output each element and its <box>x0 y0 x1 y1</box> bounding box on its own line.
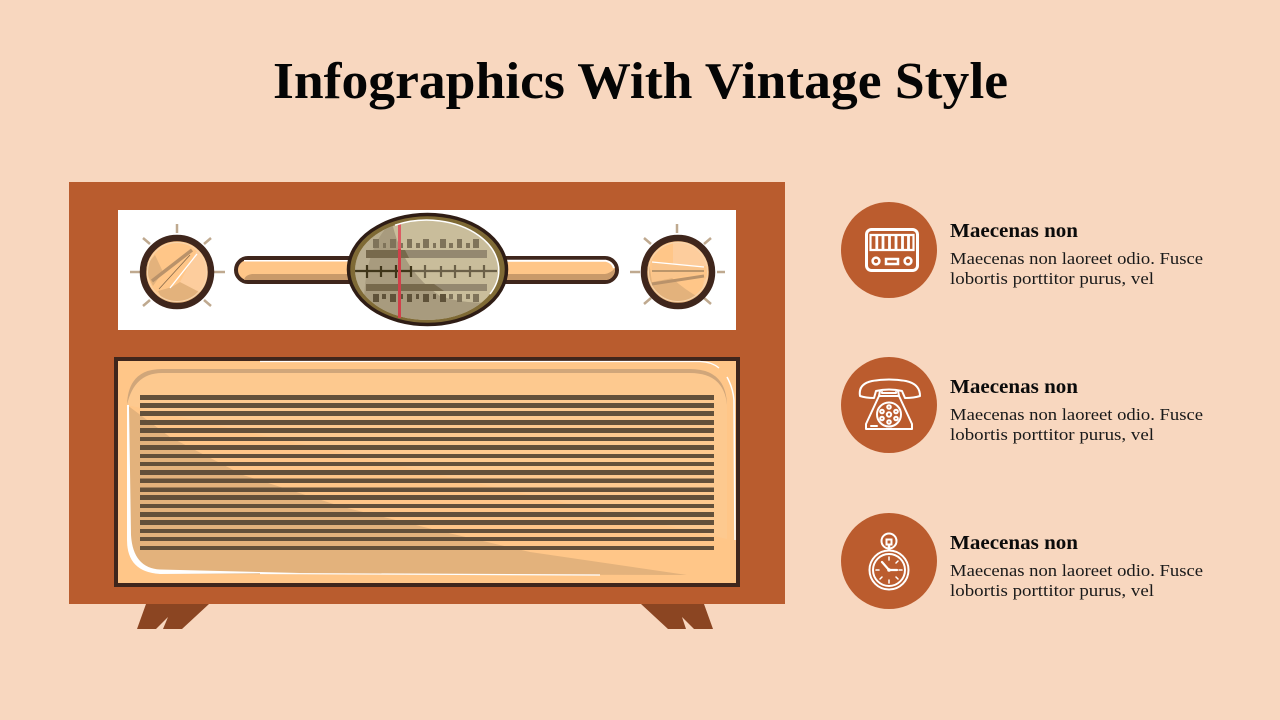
icon: stopwatch <box>841 513 937 609</box>
left knob <box>130 224 225 306</box>
item 1: radio <box>841 202 1203 298</box>
speaker inner highlight <box>127 371 727 539</box>
dial centre scale, dark side <box>354 265 412 278</box>
icon: telephone <box>841 357 937 453</box>
speaker white edge <box>127 362 735 575</box>
tuning dial <box>346 212 508 326</box>
description line 2: lobortis porttitor purus, vel <box>950 425 1154 444</box>
heading: Maecenas non <box>950 376 1078 398</box>
radio legs <box>137 604 713 629</box>
dial glass highlight <box>395 220 499 294</box>
item 3: stopwatch <box>841 513 1203 609</box>
heading: Maecenas non <box>950 220 1078 242</box>
icon: radio <box>841 202 937 298</box>
radio illustration <box>69 182 785 629</box>
dial lower scale blocks, light side <box>449 294 479 302</box>
description: Maecenas non laoreet odio. Fusce <box>950 249 1203 268</box>
dial red needle <box>398 224 401 318</box>
speaker lower shade <box>127 405 687 575</box>
description line 2: lobortis porttitor purus, vel <box>950 581 1154 600</box>
dial upper scale blocks <box>373 239 479 248</box>
speaker grille slats <box>140 395 714 550</box>
right tuning bar <box>490 258 617 282</box>
heading: Maecenas non <box>950 532 1078 554</box>
dial lower scale blocks <box>373 294 446 302</box>
radio cabinet <box>69 182 785 604</box>
description: Maecenas non laoreet odio. Fusce <box>950 405 1203 424</box>
dial centre scale, light side <box>412 265 497 278</box>
left tuning bar <box>236 258 366 282</box>
description line 2: lobortis porttitor purus, vel <box>950 269 1154 288</box>
speaker top shadow <box>127 369 727 405</box>
right knob <box>630 224 725 310</box>
title: Infographics With Vintage Style <box>273 53 1008 110</box>
description: Maecenas non laoreet odio. Fusce <box>950 561 1203 580</box>
tuning panel <box>118 210 736 340</box>
item 2: telephone <box>841 357 1203 453</box>
speaker panel <box>116 359 738 585</box>
